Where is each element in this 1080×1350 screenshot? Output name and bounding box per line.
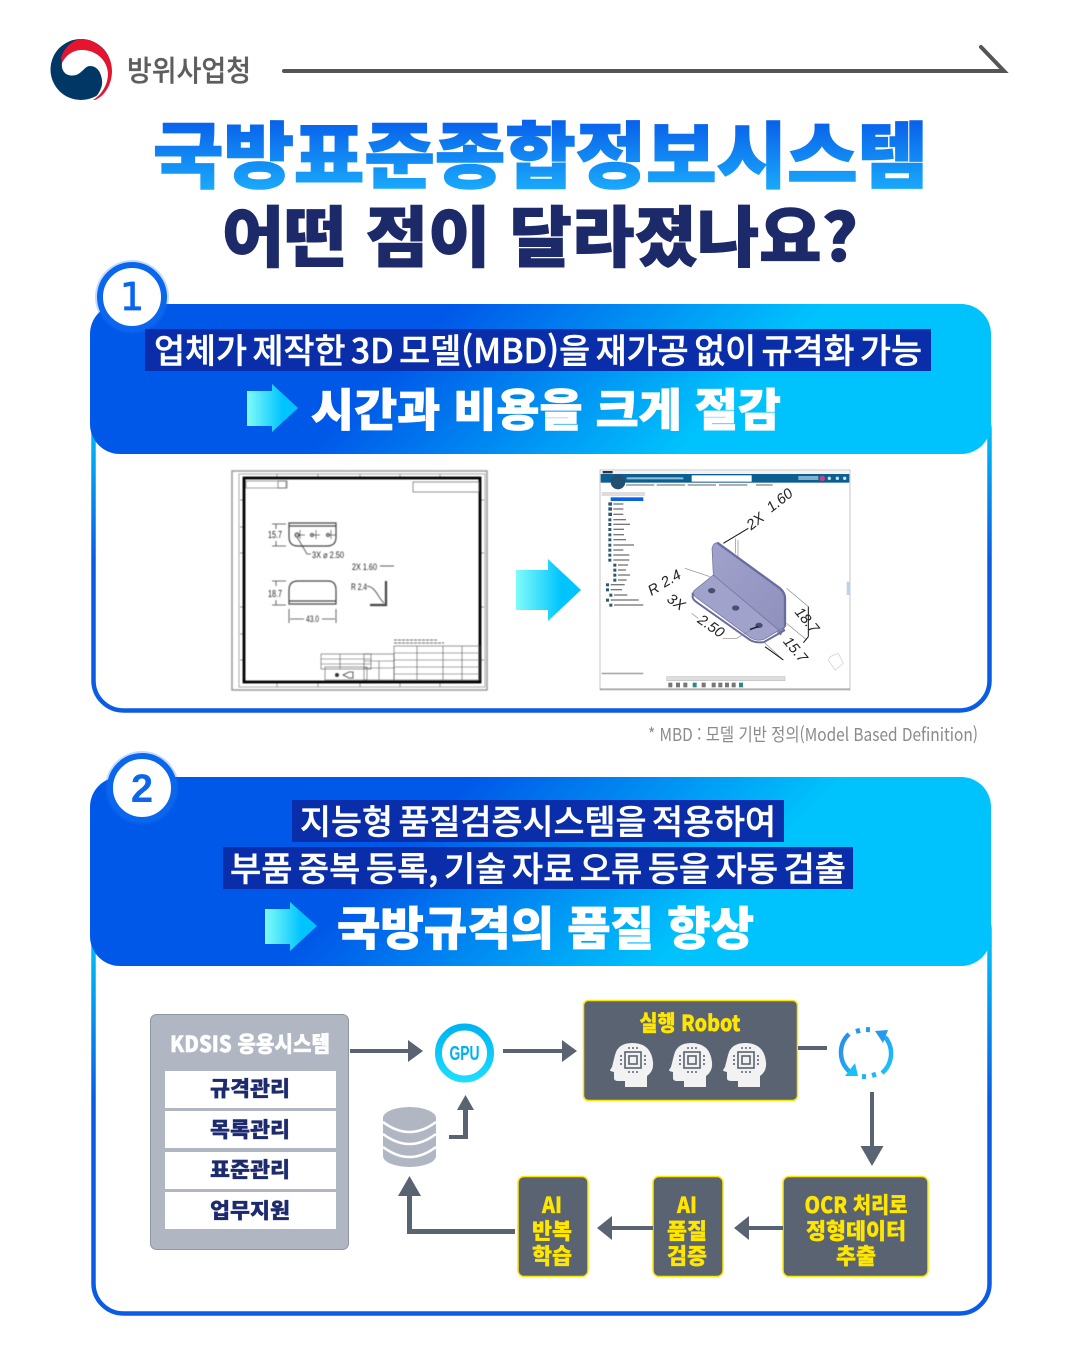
row: catalog management — [165, 1111, 336, 1148]
3D model screenshot: 2.50 — [694, 611, 728, 642]
row: standardization management: 표준관리 — [210, 1154, 290, 1184]
2D drawing: 15.7 — [268, 530, 282, 541]
arrow: system to GPU — [350, 1040, 423, 1062]
description 2b: 부품 중복 등록, 기술 자료 오류 등을 자동 검출 — [230, 842, 846, 891]
AI repeated learning box: 반복 — [532, 1214, 572, 1246]
icon: AI head 2 — [669, 1043, 712, 1087]
2D drawing: R 2.4 — [351, 582, 367, 592]
badge 2 — [105, 751, 179, 825]
3D model screenshot: 1.60 — [764, 485, 797, 516]
row: standardization management — [165, 1152, 336, 1189]
arrow: GPU to robot — [503, 1040, 577, 1062]
arrow between images — [516, 559, 581, 621]
arrow: cycle to OCR — [860, 1092, 884, 1166]
header arrow line — [284, 47, 1004, 71]
icon: AI head 1 — [610, 1043, 653, 1087]
2D drawing: 43.0 — [306, 614, 319, 624]
2D drawing: 18.7 — [268, 589, 282, 600]
description 2a: 지능형 품질검증시스템을 적용하여 — [300, 795, 776, 844]
2D drawing: 2X 1.60 — [352, 562, 377, 572]
result heading 1: 시간과 비용을 크게 절감 — [311, 374, 781, 439]
AI repeated learning box — [518, 1176, 588, 1276]
panel 1 — [90, 260, 991, 710]
arrow icon 1 — [247, 384, 298, 432]
icon: cycle — [841, 1030, 891, 1077]
3D model screenshot: 2X — [743, 509, 769, 534]
KDSIS application system box — [150, 1014, 348, 1250]
icon: AI head 3 — [723, 1043, 766, 1087]
title: 어떤 점이 달라졌나요? — [222, 185, 858, 281]
AI repeated learning box: 학습 — [532, 1239, 572, 1271]
title: 국방표준종합정보시스템 — [153, 98, 928, 203]
badge 1: 1 — [120, 275, 144, 319]
icon: database — [383, 1107, 436, 1167]
bracket part — [693, 543, 785, 642]
robot box — [584, 1000, 798, 1100]
3D model screenshot: 2.4 — [658, 567, 684, 592]
panel 1 header — [90, 304, 991, 454]
arrow: AI learning to database — [398, 1176, 515, 1234]
2D drawing: 3X ⌀ 2.50 — [312, 550, 344, 560]
result heading 2: 국방규격의 품질 향상 — [337, 893, 754, 959]
arrow: database to GPU — [449, 1095, 474, 1139]
OCR box: OCR 처리로 — [804, 1188, 908, 1220]
GPU badge: GPU — [450, 1043, 480, 1065]
row: catalog management: 목록관리 — [210, 1114, 290, 1144]
OCR box: 추출 — [836, 1239, 876, 1271]
highlight bar 2a — [292, 800, 784, 842]
row: business support — [165, 1192, 336, 1229]
AI quality verification box — [653, 1176, 723, 1276]
row: standards management: 규격관리 — [210, 1073, 290, 1103]
footnote: * MBD : 모델 기반 정의(Model Based Definition) — [648, 721, 978, 747]
3D model screenshot: R — [645, 580, 663, 599]
OCR box — [783, 1176, 928, 1276]
3D model screenshot: 18.7 — [791, 605, 822, 637]
row: business support: 업무지원 — [210, 1195, 290, 1225]
panel 2 header — [90, 777, 991, 966]
arrow icon 2 — [265, 902, 317, 951]
3D model screenshot: 15.7 — [779, 634, 811, 667]
robot box title: 실행 Robot — [640, 1006, 741, 1038]
description 1: 업체가 제작한 3D 모델(MBD)을 재가공 없이 규격화 가능 — [154, 324, 922, 373]
panel 2 — [90, 751, 991, 1314]
organisation name: 방위사업청 — [127, 48, 251, 90]
connector: robot to cycle — [798, 1046, 827, 1050]
KDSIS box title: KDSIS 응용시스템 — [170, 1027, 330, 1059]
AI quality verification box: AI — [676, 1188, 697, 1220]
AI repeated learning box: AI — [541, 1188, 562, 1220]
AI quality verification box: 품질 — [667, 1214, 707, 1246]
GPU badge — [438, 1027, 490, 1079]
highlight bar 2b — [223, 847, 853, 889]
highlight bar 1 — [145, 329, 931, 371]
3D model screenshot — [600, 470, 850, 690]
badge 2: 2 — [131, 767, 153, 811]
row: standards management — [165, 1071, 336, 1108]
title — [153, 98, 928, 281]
arrow: OCR to AI quality — [734, 1216, 783, 1240]
3D model screenshot: 3X — [664, 591, 689, 615]
panel 2 outline — [94, 900, 990, 1314]
arrow: AI quality to AI learning — [597, 1216, 653, 1240]
OCR box: 정형데이터 — [806, 1214, 906, 1246]
logo: government emblem — [50, 39, 112, 100]
AI quality verification box: 검증 — [667, 1239, 707, 1271]
badge 1 — [95, 260, 169, 334]
2D drawing — [232, 471, 487, 690]
panel 1 outline — [94, 400, 990, 710]
